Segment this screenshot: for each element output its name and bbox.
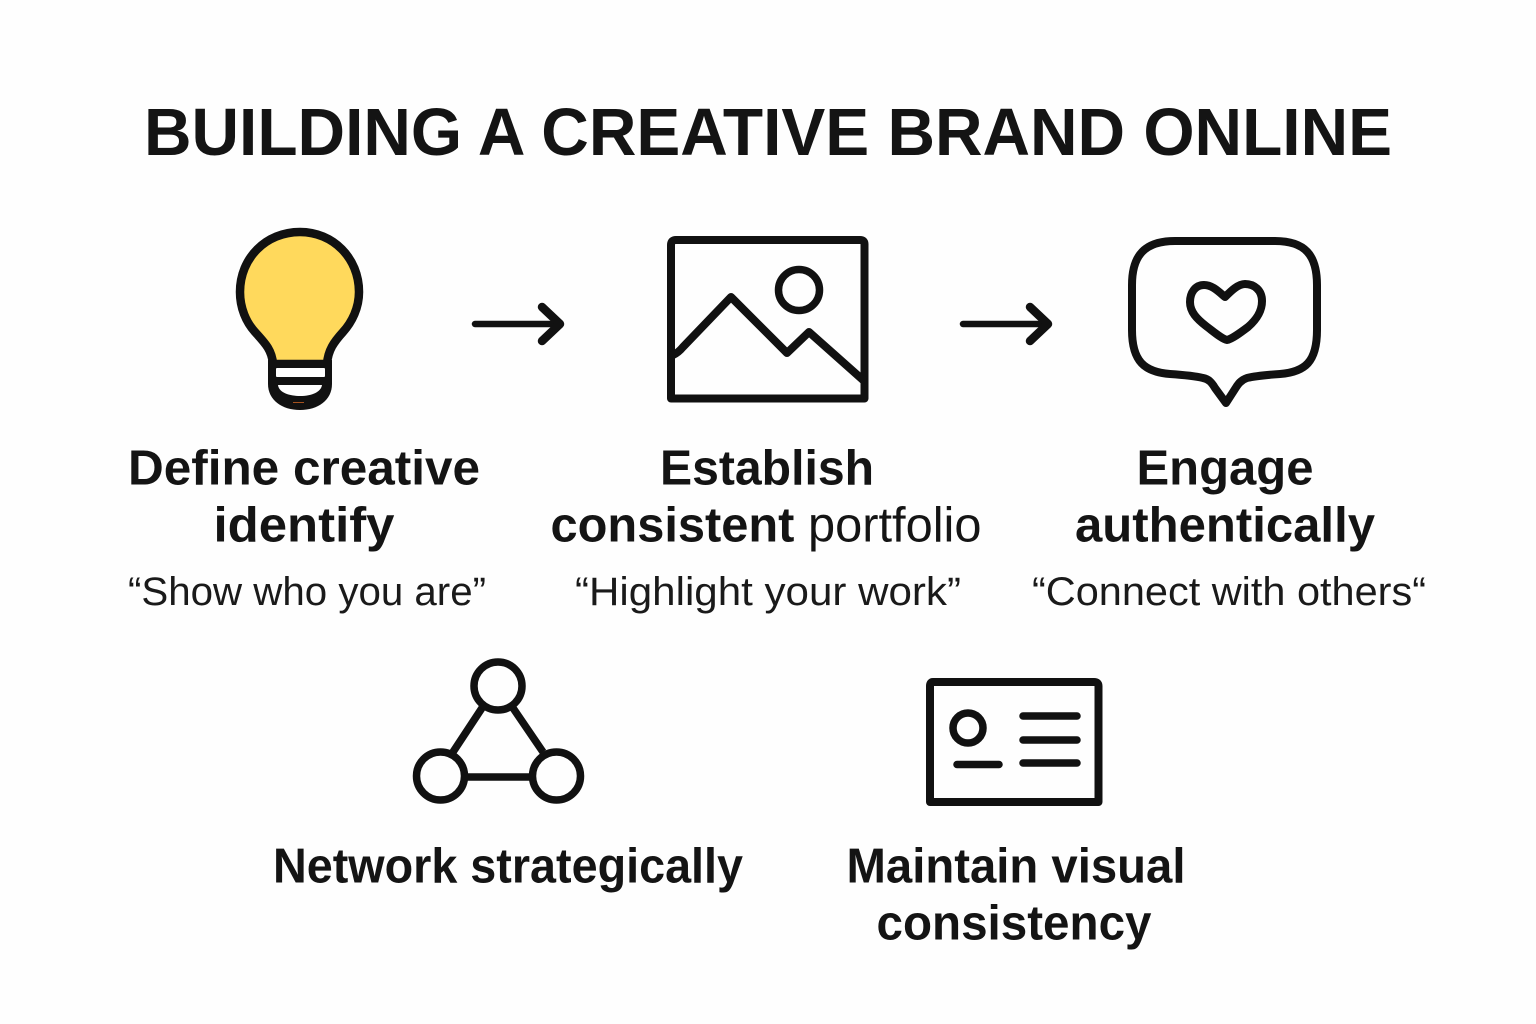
step 1 heading: identify bbox=[214, 498, 394, 552]
step 2 heading bbox=[550, 442, 982, 552]
icon: light bulb bbox=[240, 232, 359, 410]
step 1 heading bbox=[128, 442, 480, 552]
arrow: identity to portfolio bbox=[475, 307, 560, 341]
step 3 heading: Engage bbox=[1136, 442, 1314, 496]
step 3 quote: “Connect with others“ bbox=[1032, 570, 1426, 614]
step 2 heading: consistent portfolio bbox=[550, 498, 982, 552]
icon: profile card bbox=[930, 682, 1098, 802]
step 2 quote: “Highlight your work” bbox=[575, 570, 961, 614]
arrow: portfolio to engagement bbox=[963, 307, 1048, 341]
icon: speech bubble with heart bbox=[1132, 241, 1317, 403]
step 5 heading: Maintain visual bbox=[846, 840, 1186, 894]
step 3 heading bbox=[1075, 442, 1375, 552]
step 5 heading: consistency bbox=[876, 896, 1152, 950]
step 1 quote: “Show who you are” bbox=[128, 570, 486, 614]
icon: image frame bbox=[671, 240, 864, 398]
step 1 heading: Define creative bbox=[128, 442, 480, 496]
step 3 heading: authentically bbox=[1075, 498, 1375, 552]
step 4 heading: Network strategically bbox=[273, 840, 743, 894]
icon: network triangle bbox=[416, 662, 580, 800]
title: BUILDING A CREATIVE BRAND ONLINE bbox=[144, 95, 1392, 170]
step 2 heading: Establish bbox=[660, 442, 874, 496]
step 5 heading bbox=[846, 840, 1186, 950]
